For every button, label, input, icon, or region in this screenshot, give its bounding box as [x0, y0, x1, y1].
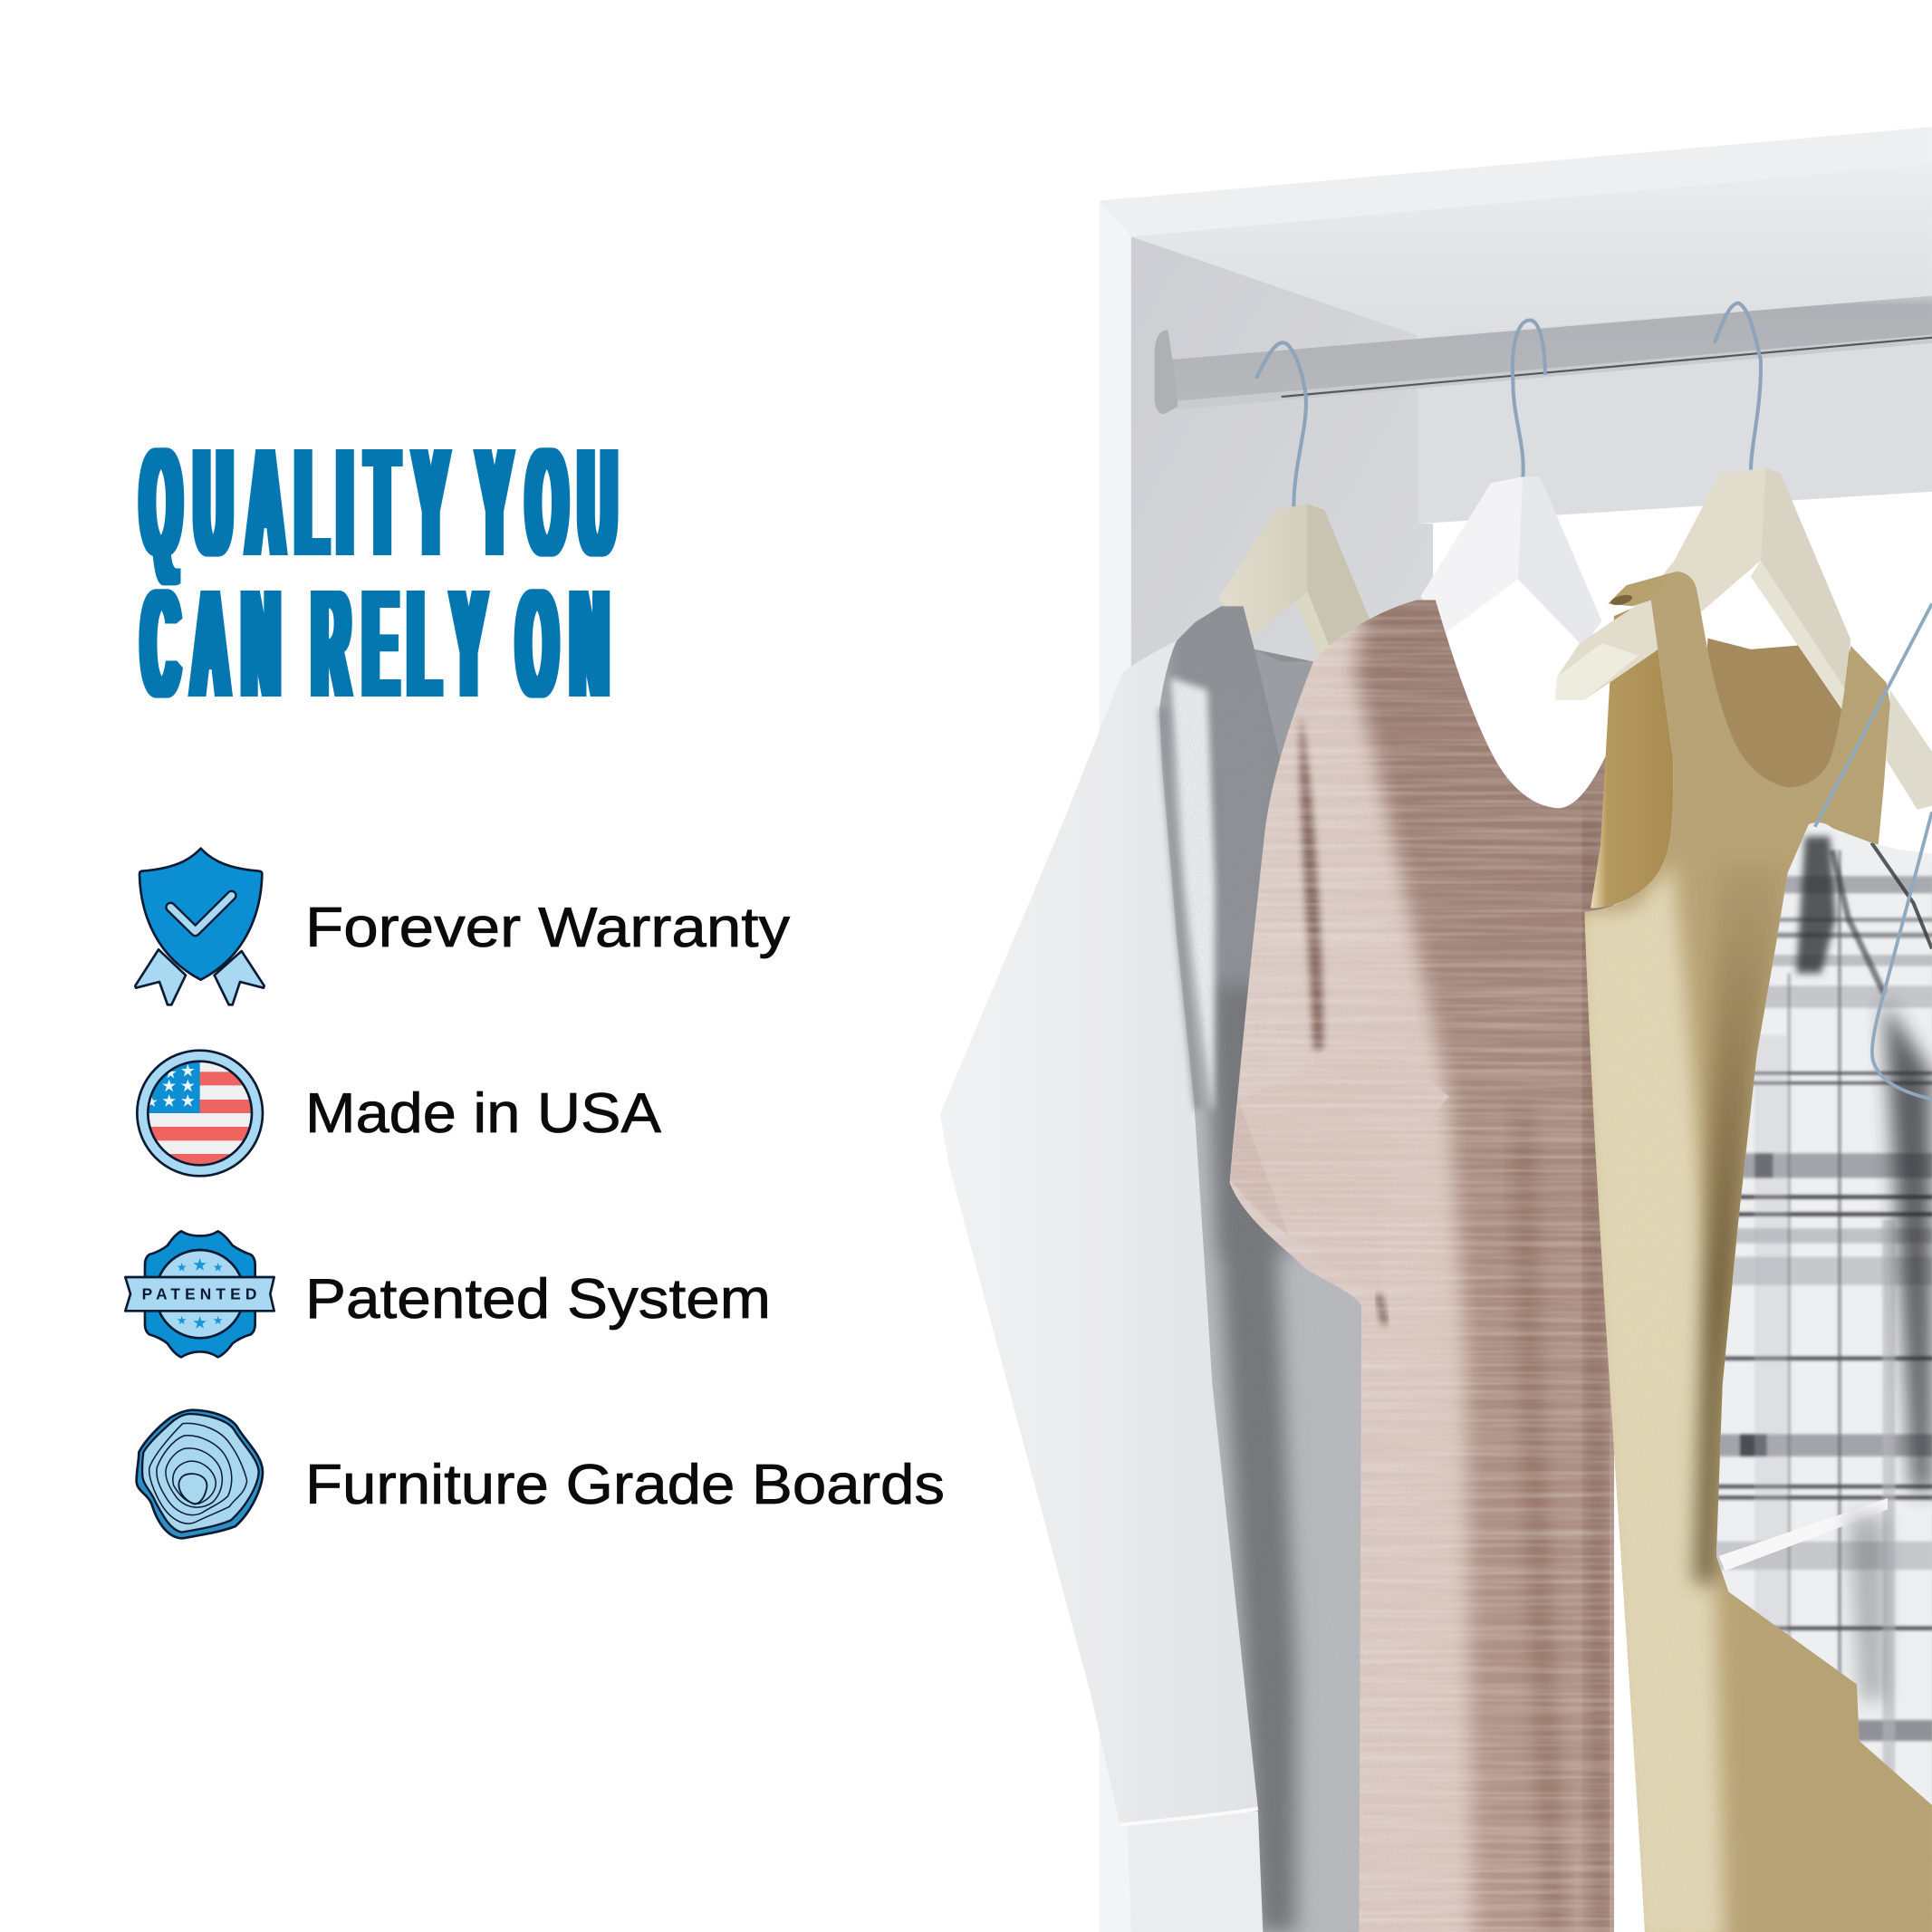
photo: wardrobe closet with hanging clothes — [940, 127, 1932, 1932]
gold dress front — [1574, 567, 1932, 1932]
hanger: beige left — [1218, 504, 1372, 656]
coat back panel behind the neck — [1254, 649, 1313, 764]
icon: wood tree rings — [137, 1410, 263, 1538]
hanging rod — [1155, 295, 1932, 414]
dress armhole — [1591, 600, 1673, 908]
feature label: Forever Warranty: Forever Warranty — [305, 897, 790, 959]
plaid shirt — [1713, 813, 1932, 1812]
icon: warranty shield with ribbons — [135, 849, 264, 1004]
feature label: Furniture Grade Boards: Furniture Grade Boards — [305, 1454, 945, 1516]
icon: USA flag badge — [137, 1051, 263, 1176]
hanger: white middle — [1420, 476, 1601, 647]
title line 1: QUALITY YOU — [141, 416, 616, 588]
hanger: beige right — [1555, 468, 1932, 810]
icon: patented badge — [125, 1231, 274, 1357]
pink t-shirt — [1220, 579, 1627, 1932]
grey coat — [1128, 591, 1374, 1932]
badge text: PATENTED — [142, 1285, 256, 1303]
title line 2: CAN RELY ON — [142, 557, 608, 729]
hanger wire over shirt — [1815, 604, 1932, 1099]
plaid fold shadows — [1796, 837, 1836, 974]
hanger wire hooks — [1257, 303, 1761, 506]
dress back interior — [1591, 600, 1860, 908]
title — [141, 416, 616, 729]
feature label: Made in USA: Made in USA — [305, 1082, 662, 1145]
white coat sleeve — [940, 640, 1258, 1825]
feature label: Patented System: Patented System — [305, 1268, 771, 1331]
t-shirt sleeve fold — [1228, 1050, 1449, 1324]
closet frame — [1099, 127, 1932, 1932]
